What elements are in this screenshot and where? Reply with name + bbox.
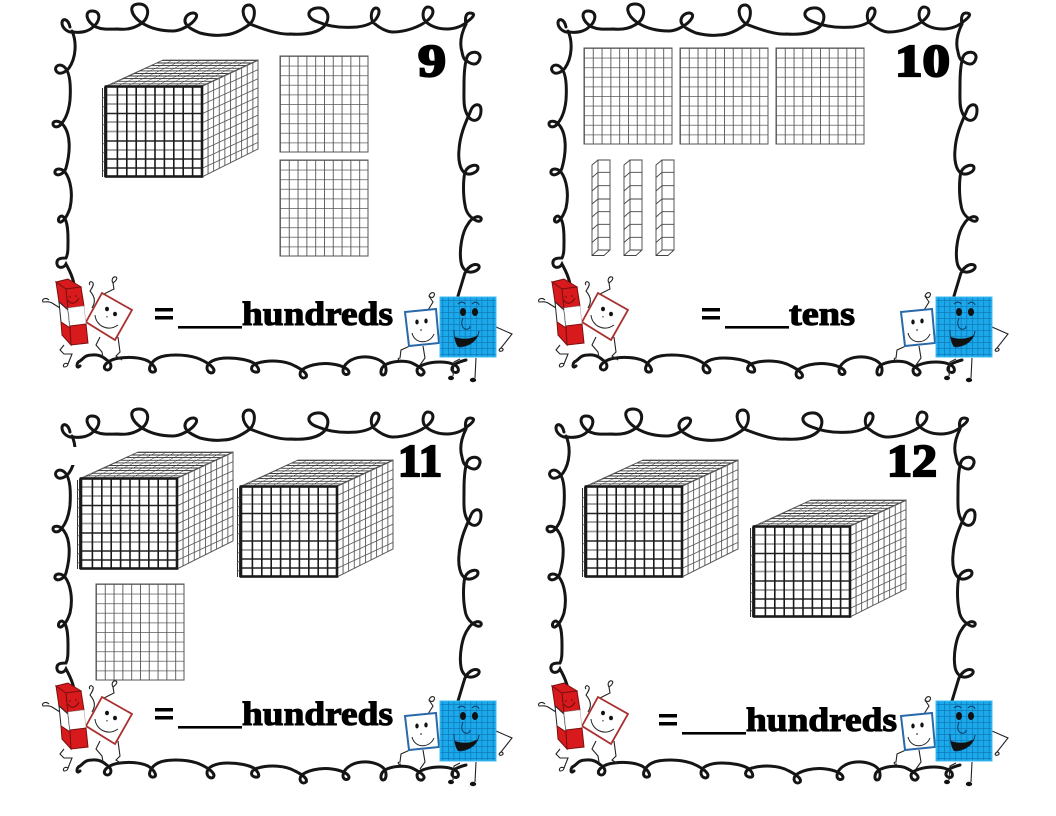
characters: blue flat and square: [398, 293, 512, 382]
decorative curly frame, card 9: [53, 4, 481, 378]
characters: red rod and square: [539, 681, 628, 771]
number 11: 11: [398, 435, 442, 486]
answer prompt: hundreds: [155, 296, 393, 333]
ten rod two: [624, 160, 642, 256]
hundreds cube one: [77, 452, 233, 569]
hundreds cube two: [237, 460, 393, 577]
hundreds cube: [102, 60, 258, 177]
characters: blue flat and square: [398, 697, 512, 786]
ten rod one: [592, 160, 610, 256]
panel: card 12: [539, 409, 1008, 786]
answer prompt: tens: [702, 296, 855, 333]
number 9: 9: [418, 35, 446, 86]
panel: card 9: [43, 4, 512, 382]
decorative curly frame, card 12: [547, 409, 975, 783]
frame gap: [66, 447, 78, 465]
characters: red rod and square: [539, 277, 628, 367]
decorative curly frame, card 11: [53, 409, 481, 783]
hundreds cube one: [582, 460, 738, 577]
flat block three: [776, 48, 864, 144]
number 10: 10: [895, 35, 950, 86]
flat block two: [680, 48, 768, 144]
number 12: 12: [887, 435, 937, 486]
decorative curly frame, card 10: [549, 4, 977, 378]
answer prompt: hundreds: [659, 702, 897, 739]
characters: blue flat and square: [894, 293, 1008, 382]
panel: card 11: [43, 409, 512, 786]
characters: blue flat and square: [894, 697, 1008, 786]
flat block upper: [280, 56, 368, 152]
flat block: [96, 584, 184, 680]
panel: card 10: [539, 4, 1008, 382]
flat block lower: [280, 160, 368, 256]
hundreds cube two: [750, 500, 906, 617]
answer prompt: hundreds: [155, 696, 393, 733]
ten rod three: [656, 160, 674, 256]
characters: red rod and square: [43, 277, 132, 367]
answer prompt: tens: tens: [789, 296, 855, 333]
characters: red rod and square: [43, 681, 132, 771]
flat block one: [584, 48, 672, 144]
